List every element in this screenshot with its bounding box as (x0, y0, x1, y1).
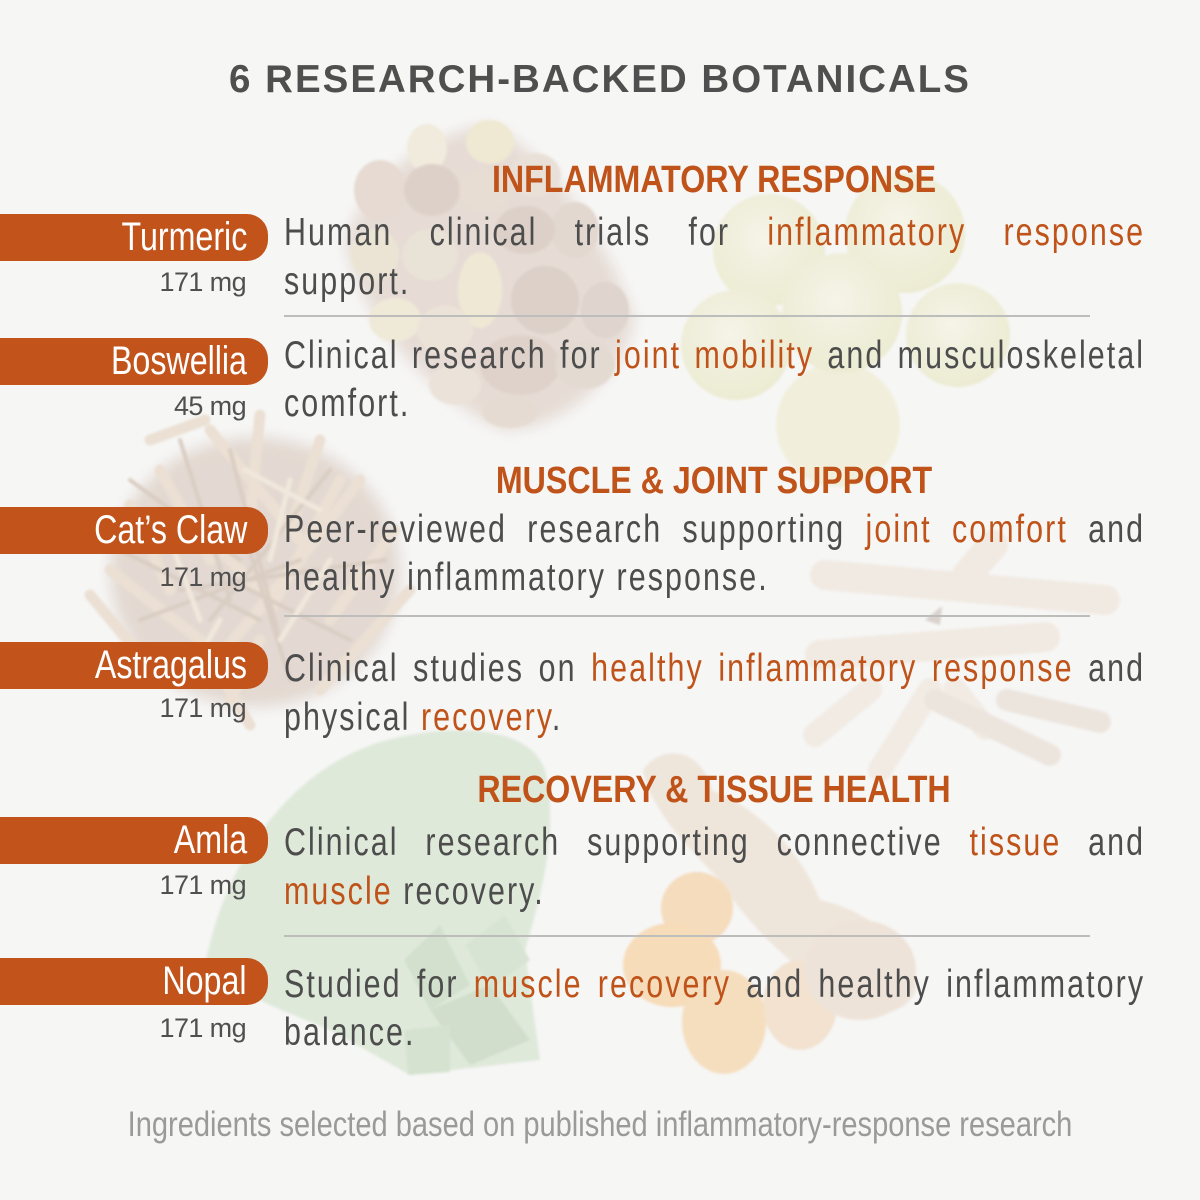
pill: Nopal: Nopal (163, 959, 247, 1003)
description: Cat's Claw (284, 508, 1145, 599)
astragalus root slices (815, 545, 1105, 770)
frankincense resin pile (345, 120, 635, 430)
pill: Boswellia (0, 338, 268, 385)
heading: recovery and tissue health: RECOVERY & TISSUE HEALTH (477, 769, 951, 811)
dose: Astragalus: 171 mg (160, 693, 246, 723)
description: Nopal: balance. (284, 1011, 416, 1054)
pill: Nopal (0, 958, 268, 1005)
description: Amla: muscle recovery. (284, 870, 545, 913)
dose: Boswellia: 45 mg (174, 391, 246, 421)
ingredient label: Nopal (0, 958, 268, 1043)
dose: Amla: 171 mg (160, 870, 246, 900)
dose: Nopal: 171 mg (160, 1013, 246, 1043)
ingredient label: Amla (0, 817, 268, 900)
cat's claw bark shreds (90, 415, 410, 725)
description: Cat's Claw: Peer-reviewed research supporting joint comfort and (284, 508, 1145, 551)
description: Cat's Claw: healthy inflammatory response. (284, 556, 769, 599)
pill: Cat's Claw (0, 507, 268, 554)
ingredient label: Boswellia (0, 338, 268, 421)
pill: Astragalus (0, 642, 268, 689)
description: Astragalus: physical recovery. (284, 696, 562, 739)
description: Boswellia: comfort. (284, 382, 410, 425)
description: Turmeric (284, 211, 1145, 303)
dose: Turmeric: 171 mg (160, 267, 246, 297)
ingredient label: Turmeric (0, 214, 268, 297)
description: Amla: Clinical research supporting connective tissue and (284, 821, 1145, 864)
title: 6 RESEARCH-BACKED BOTANICALS (229, 58, 971, 101)
nopal cactus pad and cut pieces (205, 730, 550, 1075)
description: Turmeric: Human clinical trials for inflammatory response (284, 211, 1145, 254)
heading: muscle and joint support: MUSCLE & JOINT SUPPORT (496, 460, 932, 502)
footer note: Ingredients selected based on published inflammatory-response research (128, 1105, 1072, 1144)
description: Turmeric: support. (284, 260, 410, 303)
pill: Amla (0, 817, 268, 864)
description: Amla (284, 821, 1145, 913)
description: Boswellia: Clinical research for joint mobility and musculoskeletal (284, 334, 1145, 377)
ingredient label: Cat's Claw (0, 507, 268, 592)
ingredient label: Astragalus (0, 642, 268, 723)
pill: Amla: Amla (174, 818, 247, 862)
dose: Cat's Claw: 171 mg (160, 562, 246, 592)
description: Boswellia (284, 334, 1145, 425)
description: Astragalus: Clinical studies on healthy inflammatory response and (284, 647, 1145, 690)
pill: Boswellia: Boswellia (111, 339, 247, 383)
pill: Cat's Claw: Cat’s Claw (94, 508, 247, 552)
pill: Turmeric: Turmeric (121, 215, 247, 259)
amla fruits (681, 173, 1010, 487)
pill: Turmeric (0, 214, 268, 261)
pill: Astragalus: Astragalus (95, 643, 247, 687)
description: Nopal (284, 963, 1145, 1054)
description: Nopal: Studied for muscle recovery and healthy inflammatory (284, 963, 1145, 1006)
description: Astragalus (284, 647, 1145, 739)
turmeric pieces (623, 753, 916, 1074)
heading: inflammatory response: INFLAMMATORY RESPONSE (492, 159, 936, 201)
